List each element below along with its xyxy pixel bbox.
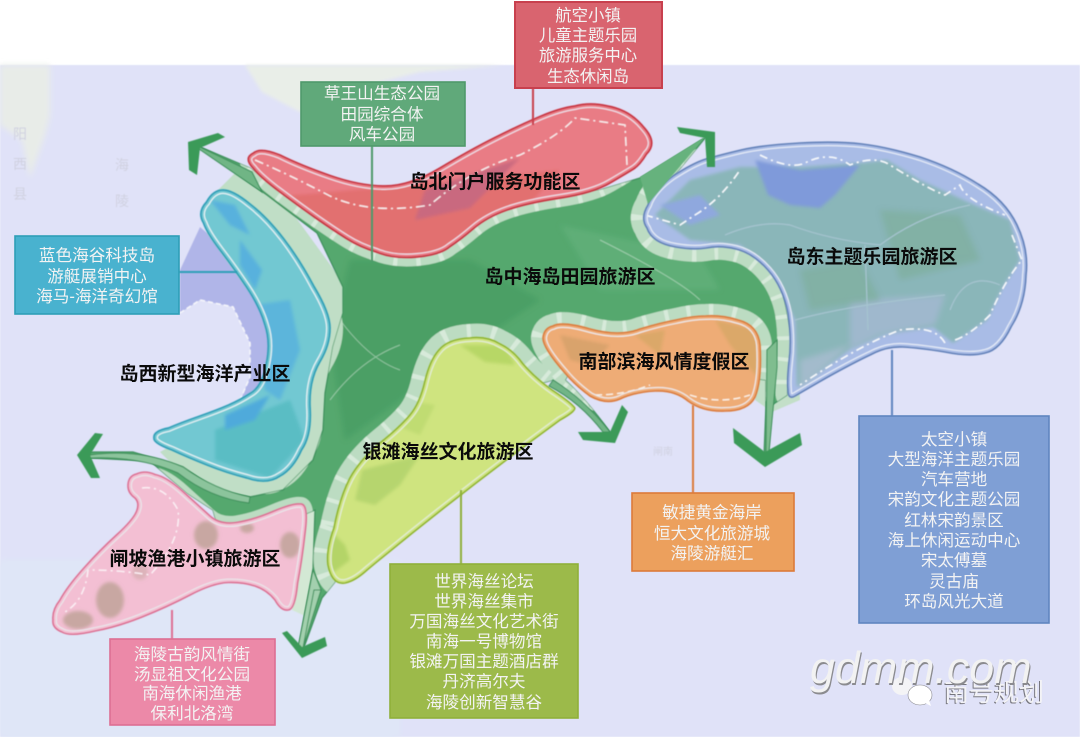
callout: silver beach projects: 万国海丝文化艺术街: [409, 612, 559, 631]
callout: east zone projects: 大型海洋主题乐园: [888, 450, 1020, 469]
callout: silver beach projects: 海陵创新智慧谷: [426, 693, 542, 712]
callout: west zone projects: 海马-海洋奇幻馆: [36, 287, 158, 306]
place names on the sea: 闸南: [653, 445, 673, 458]
callout: east zone projects: 宋太傅墓: [921, 551, 988, 570]
callout: Zhapo zone projects: 汤显祖文化公园: [134, 665, 250, 684]
arrow: north-east: [640, 127, 715, 204]
callout: east zone projects: 环岛风光大道: [904, 592, 1004, 611]
zone labels: 岛北门户服务功能区: [409, 170, 581, 193]
callout: silver beach projects: 南海一号博物馆: [426, 632, 542, 651]
zone labels: 岛西新型海洋产业区: [119, 363, 291, 385]
callout: Zhapo zone projects: 海陵古韵风情街: [134, 645, 250, 664]
callout: east zone projects: 汽车营地: [921, 470, 987, 489]
icon: wechat bubbles: [892, 677, 932, 706]
callout: north gateway projects: 儿童主题乐园: [539, 26, 637, 45]
zone labels: 岛中海岛田园旅游区: [484, 265, 656, 288]
zone labels: 南部滨海风情度假区: [578, 350, 750, 373]
place names on the sea: 县: [13, 186, 27, 202]
callout: east zone projects: 红林宋韵景区: [904, 511, 1004, 530]
arrow: south: [733, 340, 802, 467]
callout: southern seaside projects: 敏捷黄金海岸: [662, 503, 762, 522]
callout: silver beach projects: 丹济高尔夫: [443, 672, 526, 691]
panel: Zhapo fishing port zone: [53, 472, 306, 634]
panel: east theme park zone: [644, 142, 1027, 397]
callout: east zone projects: 太空小镇: [921, 430, 987, 449]
zone labels: 银滩海丝文化旅游区: [362, 440, 534, 463]
panel: central green zone: [90, 138, 790, 646]
callout: east zone projects: 宋韵文化主题公园: [888, 490, 1020, 509]
panel: north gateway zone: [240, 104, 652, 270]
arrow: south-east: [549, 380, 628, 443]
place names on the sea: 陵: [115, 193, 129, 209]
callout: central zone projects: 风车公园: [349, 125, 415, 144]
panel: silver beach silk road zone: [328, 338, 575, 583]
panel: southern seaside zone: [543, 316, 760, 411]
callout: central zone projects: 田园综合体: [341, 105, 424, 124]
callout: silver beach projects: 世界海丝论坛: [434, 572, 534, 591]
callout: west zone projects: 游艇展销中心: [47, 267, 147, 286]
place names on the sea: 西: [13, 156, 27, 172]
callout: Zhapo zone projects: 保利北洛湾: [151, 704, 233, 723]
arrow: north-west: [188, 133, 262, 192]
callout: north gateway projects: [515, 2, 662, 88]
callout: west zone projects: 蓝色海谷科技岛: [39, 246, 155, 265]
callout: southern seaside projects: [632, 493, 794, 571]
island coast band: [160, 172, 345, 502]
arrow: west: [77, 433, 250, 503]
callout: east zone projects: [859, 416, 1049, 623]
callout: silver beach projects: 银滩万国主题酒店群: [409, 652, 559, 671]
callout: southern seaside projects: 恒大文化旅游城: [654, 524, 770, 543]
callout: east zone projects: 灵古庙: [929, 572, 979, 591]
callout: east zone projects: 海上休闲运动中心: [888, 531, 1021, 550]
zone labels: [109, 170, 958, 570]
west bay: [180, 227, 272, 402]
callout: southern seaside projects: 海陵游艇汇: [671, 544, 753, 563]
callout: silver beach projects: [390, 564, 578, 718]
callout: north gateway projects: 航空小镇: [555, 7, 621, 25]
callout: north gateway projects: 生态休闲岛: [547, 68, 629, 86]
connector lines: [172, 88, 892, 639]
callout: Zhapo zone projects: [110, 639, 275, 725]
callout: central zone projects: 草王山生态公园: [324, 84, 440, 103]
zone labels: 岛东主题乐园旅游区: [786, 245, 958, 268]
place names on the sea: 海: [115, 157, 129, 173]
arrow: south-west: [282, 570, 327, 658]
watermark: gdmm.com: [810, 643, 1032, 693]
arrows: tourism axes: [77, 127, 802, 658]
watermark: gdmm.com: [811, 645, 1033, 695]
callout: north gateway projects: 旅游服务中心: [539, 47, 637, 65]
place names on the sea: 阳: [13, 126, 27, 142]
panel: west marine industry zone: [154, 190, 330, 481]
zone labels: 闸坡渔港小镇旅游区: [109, 547, 281, 570]
watermark: 南号规划: [943, 680, 1043, 708]
place names on the sea: [13, 126, 673, 458]
callout: Zhapo zone projects: 南海休闲渔港: [142, 684, 242, 703]
callout: silver beach projects: 世界海丝集市: [434, 592, 534, 611]
callout: central zone projects: [301, 82, 465, 146]
callout: west zone projects: [15, 236, 179, 314]
watermark: 南号规划: [944, 679, 1044, 707]
